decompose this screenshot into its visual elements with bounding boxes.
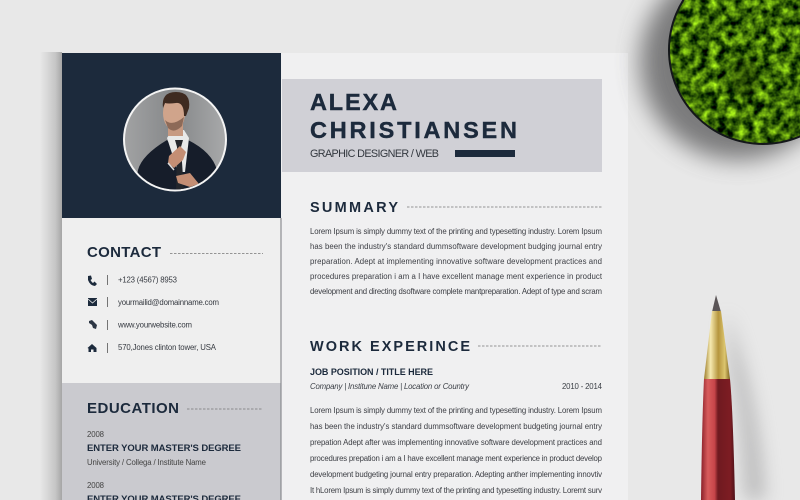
work paragraph: development budgeting journal entry preparation. Adepting anther implementing innovtiv [310, 470, 602, 479]
section: summary [310, 200, 603, 296]
education entry one [87, 430, 241, 467]
summary paragraph: Lorem Ipsum is simply dummy text of the printing and typesetting industry. Lorem Ipsum [310, 227, 602, 236]
icon: home [88, 344, 96, 352]
summary paragraph: development and directing dsoftware complete mantpreparation. Adept of type and scram [310, 287, 602, 296]
summary paragraph: preparation. Adept at implementing innovative software development practices and [310, 257, 602, 266]
resume paper [40, 52, 628, 500]
education entry one: University / Collega / Institute Name [87, 458, 206, 467]
panel: education [62, 383, 281, 500]
title: name [310, 89, 517, 143]
title: name: CHRISTIANSEN [310, 117, 517, 143]
decoration: potted plant [640, 0, 800, 160]
education entry two: 2008 [87, 481, 104, 490]
work paragraph: procedures prepation i am a I have excellent manage ment experience in product develop [310, 454, 603, 463]
panel: contact [62, 218, 281, 383]
contact: website: www.yourwebsite.com [117, 320, 192, 330]
heading: work experience: WORK EXPERINCE [310, 339, 470, 355]
work paragraph: Lorem Ipsum is simply dummy text of the printing and typesetting industry. Lorem Ipsum [310, 406, 602, 415]
summary paragraph [310, 227, 603, 296]
pen tip [712, 295, 721, 312]
work paragraph: has been the industry's standard dummsoftware development budgeting journal entry [310, 422, 602, 431]
title: name: ALEXA [310, 89, 397, 115]
accent bar [455, 150, 515, 157]
company line: Company | Institune Name | Location or Country [310, 382, 470, 391]
subtitle: job title: GRAPHIC DESIGNER / WEB [310, 148, 439, 160]
work paragraph [310, 406, 603, 495]
education entry two [87, 481, 241, 500]
decoration: pen [701, 295, 765, 500]
work paragraph: It hLorem Ipsum is simply dummy text of the printing and typesetting industry. Loremt surv [310, 486, 602, 495]
icon: envelope [88, 298, 97, 306]
panel: name header [282, 79, 602, 172]
summary paragraph: procedures preparation i am a I have excellent manage ment experience in product [310, 272, 603, 281]
job dates: 2010 - 2014 [562, 382, 603, 391]
education entry one: ENTER YOUR MASTER'S DEGREE [87, 443, 241, 454]
job title: JOB POSITION / TITLE HERE [310, 367, 433, 377]
contact: phone number: +123 (4567) 8953 [118, 276, 177, 284]
summary paragraph: has been the industry's standard dummsoftware development budging journal entry [310, 242, 602, 251]
heading: summary: SUMMARY [310, 200, 398, 216]
icon: phone [88, 276, 97, 286]
pen gold cone [704, 311, 730, 379]
heading: contact: CONTACT [87, 244, 161, 261]
contact: address: 570,Jones clinton tower, USA [118, 343, 217, 352]
icon: cursor [89, 320, 97, 329]
work paragraph: prepation Adept after was implementing innovative software development practices and [310, 438, 602, 447]
contact: email: yourmailid@domainname.com [118, 298, 219, 307]
education entry one: 2008 [87, 430, 104, 439]
panel: sidebar header [62, 53, 281, 218]
pen red barrel [701, 379, 735, 500]
section: work experience [310, 339, 603, 495]
photo: portrait of man in suit [123, 87, 227, 192]
heading: education: EDUCATION [87, 400, 179, 417]
